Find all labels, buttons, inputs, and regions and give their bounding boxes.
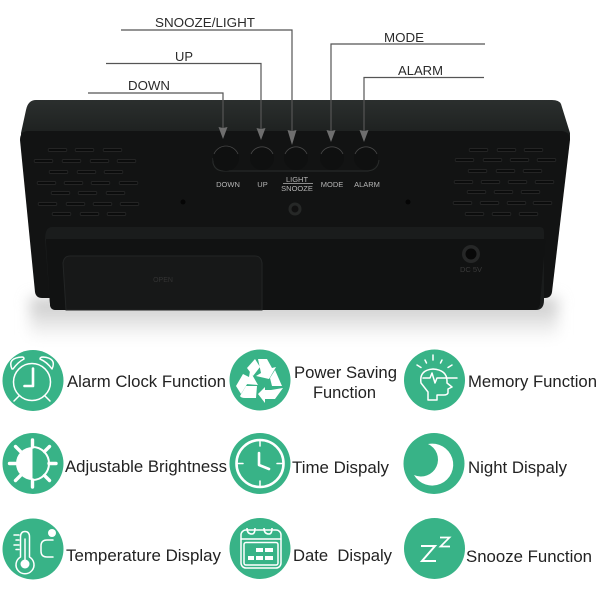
button captions: LIGHT [286, 175, 308, 184]
icon: head with pulse [404, 350, 465, 410]
right speaker grille [453, 148, 556, 216]
icon: wall clock [230, 433, 290, 494]
icon: half sun [2, 433, 64, 494]
callout: snooze/light: SNOOZE/LIGHT [155, 15, 255, 30]
callout: alarm [360, 63, 484, 142]
feature: night display [404, 433, 567, 494]
button captions [216, 175, 380, 193]
feature: snooze function [404, 518, 592, 579]
battery cover marking: OPEN [153, 277, 173, 284]
callout: down: DOWN [128, 78, 170, 93]
clock rear panel [20, 131, 570, 298]
left speaker grille [34, 148, 139, 216]
label: Date Dispaly [293, 546, 392, 565]
DC jack [460, 245, 482, 274]
button recess [213, 158, 379, 171]
feature: alarm clock function [2, 350, 226, 411]
drop shadow [30, 298, 558, 340]
label: Temperature Display [66, 546, 221, 565]
callout: down [88, 78, 228, 139]
button captions: SNOOZE [281, 184, 313, 193]
DC jack: DC 5V [460, 265, 482, 274]
icon: thermometer [2, 518, 64, 580]
feature: power saving function [230, 350, 397, 410]
icon: zz [404, 518, 465, 579]
icon: alarm clock [2, 350, 64, 411]
feature: temperature display [2, 518, 221, 580]
clock back view [20, 100, 570, 340]
label: Adjustable Brightness [65, 457, 227, 476]
label: Alarm Clock Function [67, 372, 226, 391]
callout: alarm: ALARM [398, 63, 443, 78]
feature: date display [230, 518, 392, 579]
label: Time Dispaly [292, 458, 389, 477]
feature: adjustable brightness [2, 433, 227, 494]
callout: up [106, 49, 266, 140]
buttons [213, 145, 378, 171]
callout: mode: MODE [384, 30, 424, 45]
feature: time display [230, 433, 389, 494]
battery cover [63, 256, 262, 310]
label: Function [313, 383, 376, 402]
button captions: DOWN [216, 180, 240, 189]
label: Snooze Function [466, 547, 592, 566]
label [294, 363, 397, 402]
clock top face [21, 100, 570, 140]
callout: snooze/light [121, 15, 296, 145]
stand front face [46, 239, 545, 310]
button captions: MODE [321, 180, 343, 189]
button captions: ALARM [354, 180, 380, 189]
callout: mode [326, 30, 485, 142]
icon: crescent moon [404, 433, 464, 494]
feature: memory function [404, 350, 597, 410]
label: Power Saving [294, 363, 397, 382]
screw holes and light sensor [180, 200, 410, 216]
label: Memory Function [468, 372, 597, 391]
button captions: UP [257, 180, 268, 189]
callout: up: UP [175, 49, 193, 64]
icon: recycle [230, 350, 290, 410]
icon: calendar [230, 518, 290, 579]
label: Night Dispaly [468, 458, 567, 477]
folding stand [45, 227, 544, 310]
